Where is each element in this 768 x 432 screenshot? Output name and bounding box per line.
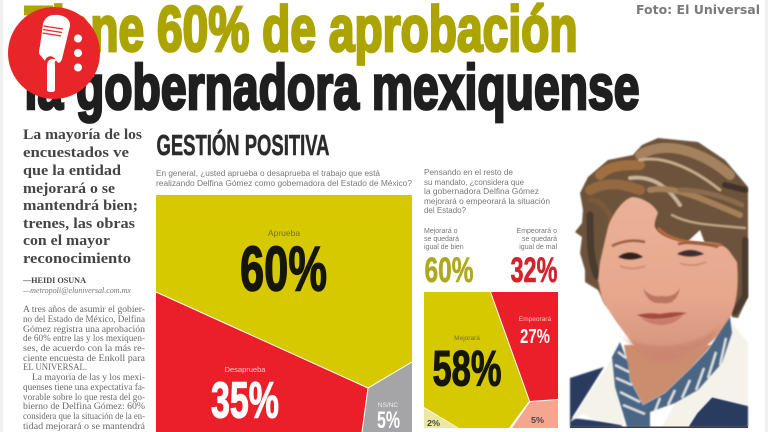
photo credit: Foto: El Universal	[636, 2, 760, 17]
label: mejorará	[432, 335, 502, 396]
title	[24, 0, 640, 123]
label: aprueba: Aprueba	[268, 228, 300, 238]
label: desaprueba	[211, 365, 279, 428]
segment: pale 2%	[424, 408, 458, 428]
article body text: tidad mejorará o se mantendrá	[23, 422, 145, 432]
label: aprueba: 60%	[240, 234, 327, 304]
article body text: Gómez registra una aprobación	[23, 325, 145, 335]
summary: mejorará o igual de bien	[424, 228, 474, 290]
article body text: EL UNIVERSAL.	[23, 363, 87, 373]
section heading: GESTIÓN POSITIVA	[156, 128, 330, 162]
chart: approval treemap	[156, 195, 412, 432]
segment: peach 5%	[512, 400, 558, 428]
approval question	[156, 168, 412, 188]
label: desaprueba: Desaprueba	[225, 365, 266, 374]
scarf	[612, 317, 732, 427]
subheading deck: trenes, las obras	[23, 216, 135, 232]
label: 5%: 5%	[531, 416, 544, 425]
hair highlights	[590, 148, 745, 312]
article body text: ciente encuesta de Enkoll para	[23, 354, 145, 364]
article body text: vorable sobre lo que resta del go-	[23, 393, 145, 403]
shirt	[570, 323, 748, 427]
mouth	[637, 312, 687, 325]
subheading deck: con el mayor	[23, 233, 111, 249]
byline: —HEIDI OSUNA	[22, 275, 87, 285]
segment: empeorará	[491, 292, 558, 401]
subheading deck: mejorará o se	[23, 181, 116, 197]
future outlook question: la gobernadora Delfina Gómez	[424, 186, 539, 196]
segment: aprueba	[156, 195, 412, 432]
photo base line	[570, 426, 748, 428]
subheading deck: que la entidad	[23, 163, 121, 179]
summary: empeorará o igual de mal	[510, 228, 558, 290]
summary: empeorará o igual de mal: Empeorará o	[517, 228, 557, 235]
future outlook question	[424, 167, 550, 215]
subheading deck: mantendrá bien;	[23, 198, 138, 214]
segment: ns/nc	[362, 362, 412, 432]
cheek shading	[620, 325, 722, 363]
future outlook question: Pensando en el resto de	[424, 167, 513, 177]
jacket	[570, 367, 748, 427]
label: aprueba	[240, 228, 327, 304]
summary: mejorará o igual de bien: 60%	[424, 251, 474, 290]
summary: empeorará o igual de mal: igual de mal	[519, 244, 557, 251]
subheading deck: reconocimiento	[23, 251, 131, 267]
article body text: bierno de Delfina Gómez: 60%	[23, 401, 145, 412]
byline: —metropoli@eluniversal.com.mx	[22, 286, 131, 295]
microphone head	[39, 15, 70, 63]
label: mejorará: Mejorará	[454, 335, 480, 342]
microphone stem	[47, 59, 57, 92]
icon: red microphone badge	[8, 7, 100, 99]
neck	[624, 345, 712, 405]
approval question: En general, ¿usted aprueba o desaprueba el trabajo que está	[156, 168, 380, 178]
label: empeorará	[519, 316, 551, 348]
photo: portrait of Delfina Gómez	[570, 138, 748, 428]
article body text: A tres años de asumir el gobier-	[23, 305, 145, 315]
article body text	[23, 305, 145, 432]
summary: mejorará o igual de bien: se quedará	[424, 236, 459, 243]
label: ns/nc: NS/NC	[378, 402, 398, 409]
eyes and brows	[612, 241, 718, 268]
future outlook question: su mandato, ¿considera que	[424, 177, 524, 187]
article body text: considera que la situación de la en-	[23, 412, 145, 422]
article body text: no del Estado de México, Delfina	[23, 314, 145, 325]
summary: empeorará o igual de mal: 32%	[510, 251, 558, 290]
article body text: de 60% entre las y los mexiquen-	[23, 334, 145, 344]
summary: mejorará o igual de bien: igual de bien	[424, 244, 464, 251]
label: empeorará: Empeorará	[519, 316, 551, 323]
label: desaprueba: 35%	[211, 372, 279, 428]
article body text: La mayoría de las y los mexi-	[32, 373, 145, 383]
subheading deck	[23, 127, 142, 267]
future outlook question: del Estado?	[424, 205, 466, 215]
hair back	[575, 138, 748, 318]
segment: mejorará	[424, 292, 529, 428]
label: empeorará: 27%	[520, 326, 550, 348]
article body text: ses, de acuerdo con la más re-	[23, 344, 145, 354]
label: 2%: 2%	[427, 419, 440, 428]
approval question: realizando Delfina Gómez como gobernadora del Estado de México?	[156, 178, 412, 188]
summary: empeorará o igual de mal: se quedará	[522, 236, 557, 243]
subheading deck: La mayoría de los	[23, 127, 142, 143]
byline	[22, 275, 131, 295]
subheading deck: encuestados ve	[23, 145, 130, 161]
nose	[643, 288, 680, 303]
segment: desaprueba	[156, 292, 368, 432]
face	[598, 197, 738, 363]
article body text: quenses tiene una expectativa fa-	[23, 382, 145, 393]
future outlook question: mejorará o empeorará la situación	[424, 196, 550, 206]
label: ns/nc	[377, 402, 400, 432]
label: mejorará: 58%	[432, 340, 502, 396]
fringe orange shadow	[658, 228, 722, 245]
chart: outlook treemap	[424, 292, 558, 428]
summary: mejorará o igual de bien: Mejorará o	[424, 228, 458, 235]
